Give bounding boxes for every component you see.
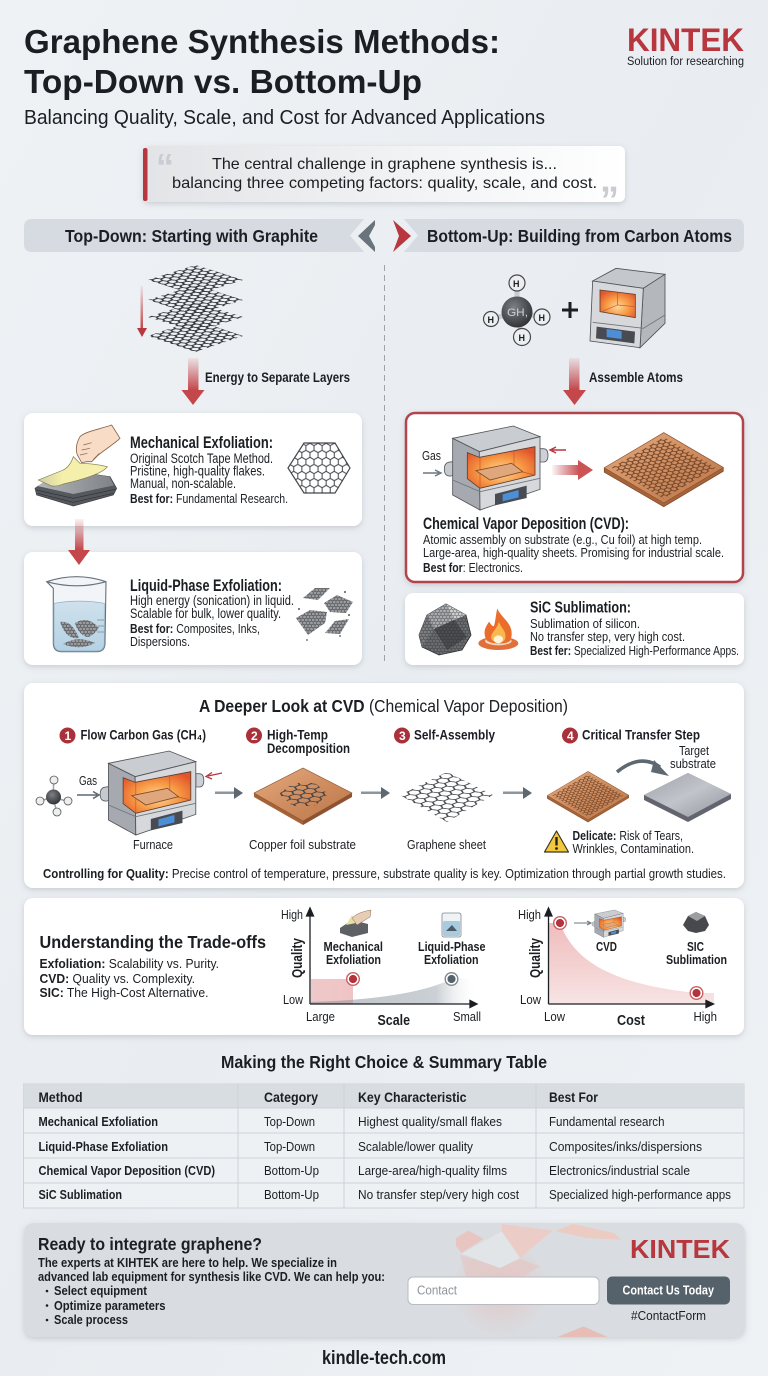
row: chemical vapor deposition: Electronics/industrial scale — [549, 1163, 690, 1178]
text: liquid-phase exfoliation: Dispersions. — [130, 634, 190, 649]
row: mechanical exfoliation — [38, 1114, 664, 1129]
panel: chemical vapor deposition — [406, 413, 743, 582]
table header: Key Characteristic — [358, 1089, 467, 1105]
row: liquid-phase exfoliation: Liquid-Phase Exfoliation — [38, 1139, 168, 1154]
icon: beaker with flakes — [47, 577, 106, 652]
icon: opening quote mark: “ — [156, 146, 174, 187]
logo: KINTEK: KINTEK — [627, 22, 744, 58]
row: mechanical exfoliation: Top-Down — [264, 1114, 315, 1129]
text: trade-offs summary: Exfoliation: Scalability vs. Purity. — [40, 956, 219, 971]
logo: KINTEK small: KINTEK — [630, 1234, 730, 1264]
chart: quality vs scale: Scale — [378, 1013, 410, 1029]
icon: graphene hexagon flake — [288, 443, 350, 493]
row: liquid-phase exfoliation: Scalable/lower quality — [358, 1139, 473, 1154]
input: contact: Contact — [417, 1282, 457, 1298]
text: mechanical exfoliation: Manual, non-scalable. — [130, 476, 236, 491]
chart: quality vs cost: Sublimation — [666, 953, 727, 967]
callout: central challenge quote: The central challenge in graphene synthesis is... — [212, 156, 557, 173]
icon: flame — [478, 608, 518, 650]
arrow: exhaust — [550, 447, 566, 453]
text: liquid-phase exfoliation: High energy (sonication) in liquid. — [130, 593, 294, 608]
panel: trade-offs — [24, 898, 744, 1035]
subtitle: Balancing Quality, Scale, and Cost for Advanced Applications — [24, 107, 545, 129]
logo: KINTEK: Solution for researching — [627, 56, 744, 68]
text: call to action: Ready to integrate graphene? — [38, 1234, 262, 1254]
icon: furnace — [100, 751, 204, 835]
text: mechanical exfoliation: Best for: Fundamental Research. — [130, 491, 288, 506]
icon: warning triangle — [544, 831, 568, 852]
text: CVD: Best for: Electronics. — [423, 561, 523, 575]
text: trade-offs summary — [40, 932, 266, 1000]
callout: central challenge quote: balancing three competing factors: quality, scale, and cost. — [172, 175, 597, 192]
chart: quality vs cost: Low — [520, 993, 542, 1007]
text: call to action: advanced lab equipment for synthesis like CVD. We can help you: — [38, 1270, 385, 1284]
text: trade-offs summary: SIC: The High-Cost Alternative. — [40, 985, 208, 1000]
arrow: process to copper sheet — [552, 460, 593, 480]
label: target substrate: substrate — [670, 757, 716, 771]
step 3 heading: 3 — [399, 729, 406, 743]
step 3 heading — [394, 728, 495, 744]
row: SiC sublimation: Bottom-Up — [264, 1187, 319, 1202]
label: graphene sheet: Graphene sheet — [407, 838, 486, 852]
icon: small methane — [36, 776, 72, 816]
row: chemical vapor deposition — [38, 1163, 690, 1178]
arrow: gas into furnace — [77, 792, 99, 798]
chart: quality vs scale: High — [281, 908, 303, 922]
label: assemble atoms: Assemble Atoms — [589, 369, 683, 385]
row: mechanical exfoliation: Fundamental research — [549, 1114, 664, 1129]
icon: methane molecule: H — [488, 315, 494, 325]
text: liquid-phase exfoliation: Liquid-Phase Exfoliation: — [130, 577, 282, 595]
chart: quality vs scale — [281, 908, 486, 1029]
chart: quality vs scale: Liquid-Phase — [418, 940, 486, 954]
heading: top-down banner — [24, 219, 364, 252]
panel: mechanical exfoliation — [24, 413, 362, 526]
step 4 heading: Critical Transfer Step — [582, 728, 700, 742]
text: SiC: Sublimation of silicon. — [530, 616, 640, 631]
icon: methane molecule: H — [513, 279, 520, 289]
arrow: energy — [182, 358, 204, 405]
text: controlling for quality: Controlling for Quality: Precise control of temperature, pressure, substrate quality is key. Optimization through partial growth studies. — [43, 867, 726, 881]
text: delicate warning: Delicate: Risk of Tears, — [572, 829, 683, 843]
icon: mini SiC crystal — [683, 912, 709, 933]
row: liquid-phase exfoliation: Composites/inks/dispersions — [549, 1139, 702, 1154]
panel: deeper look at CVD — [24, 683, 744, 888]
icon: methane molecule: GH, — [507, 307, 528, 319]
chart: quality vs scale: Small — [453, 1010, 481, 1024]
panel: liquid-phase exfoliation — [24, 552, 362, 665]
panel: call to action — [24, 1223, 745, 1338]
arrow: step 3 to 4 — [503, 787, 532, 799]
chart: quality vs scale: Low — [283, 993, 304, 1007]
chart: quality vs cost: Cost — [617, 1013, 645, 1029]
arrow: assemble atoms — [563, 358, 586, 405]
button: contact us today — [607, 1276, 730, 1304]
text: delicate warning — [572, 829, 694, 856]
text: call to action: Optimize parameters — [54, 1299, 166, 1313]
arrow: mechanical to liquid-phase — [68, 519, 90, 565]
text: mechanical exfoliation: Original Scotch Tape Method. — [130, 451, 273, 466]
chart: quality vs cost: SIC — [687, 940, 704, 954]
label: contact form: #ContactForm — [631, 1309, 706, 1323]
text: mechanical exfoliation — [130, 434, 288, 506]
row: mechanical exfoliation: Highest quality/small flakes — [358, 1114, 502, 1129]
table header: Category — [264, 1089, 318, 1105]
row: SiC sublimation: Specialized high-performance apps — [549, 1187, 731, 1202]
title — [24, 24, 500, 101]
text: trade-offs summary: CVD: Quality vs. Complexity. — [40, 971, 195, 986]
icon: left chevron — [358, 220, 375, 252]
text: SiC: SiC Sublimation: — [530, 600, 631, 616]
chart: quality vs cost: Low — [544, 1010, 566, 1024]
heading: bottom-up banner: Bottom-Up: Building from Carbon Atoms — [427, 226, 732, 246]
step 1 heading: Flow Carbon Gas (CH₄) — [80, 728, 206, 742]
step 3 heading: Self-Assembly — [414, 728, 495, 742]
icon: methane molecule: H — [518, 333, 525, 343]
icon: SiC crystal — [419, 604, 471, 655]
icon: methane molecule — [484, 275, 550, 346]
footer: website: kindle-tech.com — [322, 1348, 446, 1369]
panel: SiC sublimation — [405, 593, 744, 665]
heading: deeper look: A Deeper Look at CVD (Chemical Vapor Deposition) — [199, 696, 568, 716]
row: mechanical exfoliation: Mechanical Exfoliation — [38, 1114, 158, 1129]
icon: plus — [562, 302, 578, 318]
table header: Method — [38, 1089, 82, 1105]
text: CVD: Atomic assembly on substrate (e.g., Cu foil) at high temp. — [423, 532, 702, 547]
heading: bottom-up banner — [404, 219, 744, 252]
text: call to action: The experts at KIHTEK are here to help. We specialize in — [38, 1256, 337, 1270]
label: target substrate: Target — [679, 744, 709, 758]
text: call to action: Select equipment — [54, 1284, 148, 1298]
arrow: gas inlet — [423, 470, 441, 476]
row: SiC sublimation — [38, 1187, 731, 1202]
icon: hand peeling tape from graphite — [35, 425, 120, 506]
icon: graphene sheet — [400, 772, 493, 822]
label: furnace: Furnace — [133, 838, 173, 852]
row: SiC sublimation: No transfer step/very high cost — [358, 1187, 519, 1202]
chart: quality vs scale: Large — [306, 1010, 335, 1024]
text: mechanical exfoliation: Pristine, high-quality flakes. — [130, 464, 265, 478]
step 1 heading: 1 — [64, 729, 72, 743]
icon: mini beaker — [442, 913, 461, 937]
chart: quality vs cost: Quality — [528, 938, 544, 978]
chart: quality vs scale: Exfoliation — [326, 953, 381, 967]
icon: graphite layers — [148, 265, 243, 352]
table: summary — [24, 1084, 744, 1208]
step 2 heading: High-Temp — [267, 728, 328, 742]
chart: quality vs scale: Mechanical — [324, 940, 383, 954]
row: chemical vapor deposition: Large-area/high-quality films — [358, 1163, 507, 1178]
icon: closing quote mark: ” — [600, 180, 619, 222]
text: call to action — [38, 1234, 385, 1327]
icon: right chevron — [393, 220, 411, 252]
label: target substrate — [670, 744, 716, 771]
icon: CVD furnace — [444, 426, 548, 510]
row: liquid-phase exfoliation: Top-Down — [264, 1139, 315, 1154]
arrow: graphite downward — [137, 286, 147, 337]
text: CVD — [423, 515, 724, 575]
arrow: transfer curve — [617, 760, 669, 776]
text: trade-offs summary: Understanding the Trade-offs — [40, 932, 266, 952]
icon: copper with graphene film — [547, 771, 629, 822]
heading: summary table: Making the Right Choice & Summary Table — [221, 1052, 547, 1072]
text: delicate warning: Wrinkles, Contamination. — [572, 842, 694, 856]
title: Top-Down vs. Bottom-Up — [24, 64, 422, 101]
row: chemical vapor deposition: Chemical Vapor Deposition (CVD) — [38, 1163, 215, 1178]
arrow: step 1 to 2 — [215, 787, 243, 799]
icon: copper foil with graphene nucleus — [254, 768, 352, 825]
text: liquid-phase exfoliation — [130, 577, 294, 649]
button: contact us today: Contact Us Today — [622, 1282, 715, 1298]
arrow: exhaust — [206, 772, 222, 779]
icon: copper plate with graphene — [604, 433, 723, 507]
text: liquid-phase exfoliation: Scalable for bulk, lower quality. — [130, 606, 281, 621]
step 2 heading — [246, 728, 350, 756]
heading: top-down banner: Top-Down: Starting with Graphite — [65, 226, 318, 246]
row: SiC sublimation: SiC Sublimation — [38, 1187, 122, 1202]
chart: quality vs cost: High — [694, 1010, 717, 1024]
chart: quality vs cost: CVD — [596, 940, 617, 954]
label: energy to separate layers: Energy to Separate Layers — [205, 369, 350, 385]
icon: target substrate — [644, 773, 731, 822]
icon: mini mechanical exfoliation — [340, 910, 371, 937]
arrow: step 2 to 3 — [361, 787, 390, 799]
text: call to action: Scale process — [54, 1313, 128, 1327]
arrow: mini gas — [574, 921, 591, 925]
chart: quality vs cost: High — [518, 908, 541, 922]
icon: mini furnace — [592, 910, 626, 937]
icon: methane molecule: H — [538, 313, 545, 323]
text: CVD: Chemical Vapor Deposition (CVD): — [423, 515, 629, 533]
row: liquid-phase exfoliation — [38, 1139, 702, 1154]
title: Graphene Synthesis Methods: — [24, 24, 500, 61]
text: mechanical exfoliation: Mechanical Exfoliation: — [130, 434, 273, 452]
chart: quality vs scale: Exfoliation — [424, 953, 478, 967]
chart: quality vs cost — [518, 908, 727, 1029]
step 2 heading: Decomposition — [267, 741, 350, 756]
table header — [38, 1089, 598, 1105]
icon: furnace front view — [590, 268, 665, 348]
callout: central challenge quote — [143, 146, 625, 222]
step 1 heading — [60, 728, 206, 744]
label: gas: Gas — [79, 774, 97, 788]
input: contact — [408, 1277, 599, 1304]
text: liquid-phase exfoliation: Best for: Composites, Inks, — [130, 621, 260, 636]
step 2 heading: 2 — [251, 729, 258, 743]
icon: dispersed flakes — [296, 588, 353, 641]
text: SiC — [530, 600, 739, 658]
label: gas: Gas — [422, 449, 441, 463]
text: SiC: No transfer step, very high cost. — [530, 629, 685, 644]
chart: quality vs scale: Quality — [290, 938, 306, 978]
row: chemical vapor deposition: Bottom-Up — [264, 1163, 319, 1178]
table header: Best For — [549, 1089, 598, 1105]
label: copper foil substrate: Copper foil substrate — [249, 838, 356, 852]
step 4 heading: 4 — [567, 729, 574, 743]
